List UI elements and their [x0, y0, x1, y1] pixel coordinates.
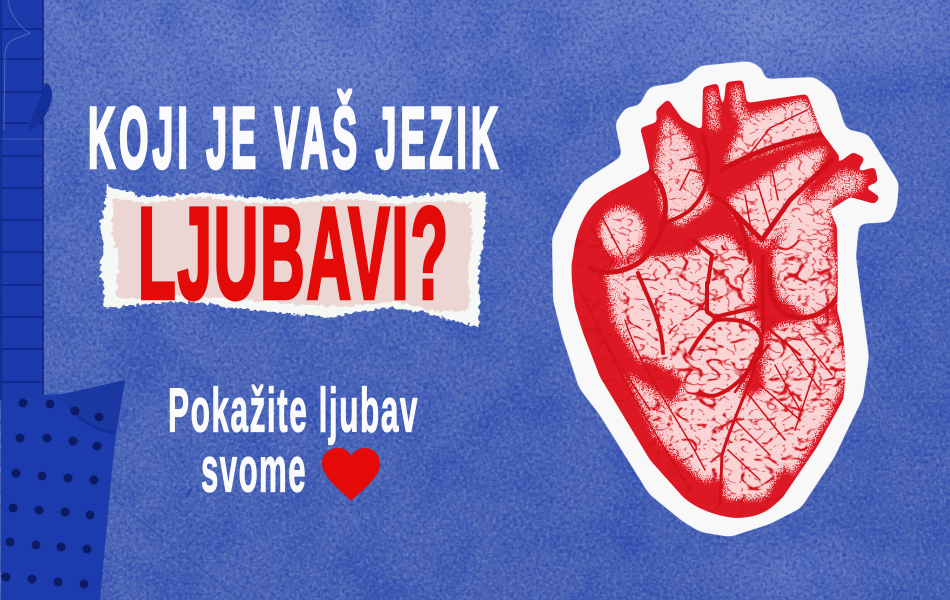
icon: small red heart — [322, 448, 380, 501]
torn paper label — [100, 180, 487, 327]
heart illustration — [572, 80, 878, 518]
organic vein network — [570, 100, 860, 530]
subtitle — [168, 376, 419, 506]
pale stippled patches — [599, 84, 868, 500]
torn paper label: LJUBAVI? — [138, 180, 450, 326]
sticker white outline — [552, 61, 899, 537]
anatomical heart sticker — [552, 61, 899, 537]
notebook strip with grid, top left — [1, 0, 60, 400]
subtitle: svome — [201, 434, 307, 506]
pink wash over the engraving — [597, 84, 868, 503]
dark torn tape with dots, bottom left — [1, 380, 125, 600]
main vessels and contours — [580, 110, 840, 505]
subtitle: Pokažite ljubav — [168, 376, 419, 446]
